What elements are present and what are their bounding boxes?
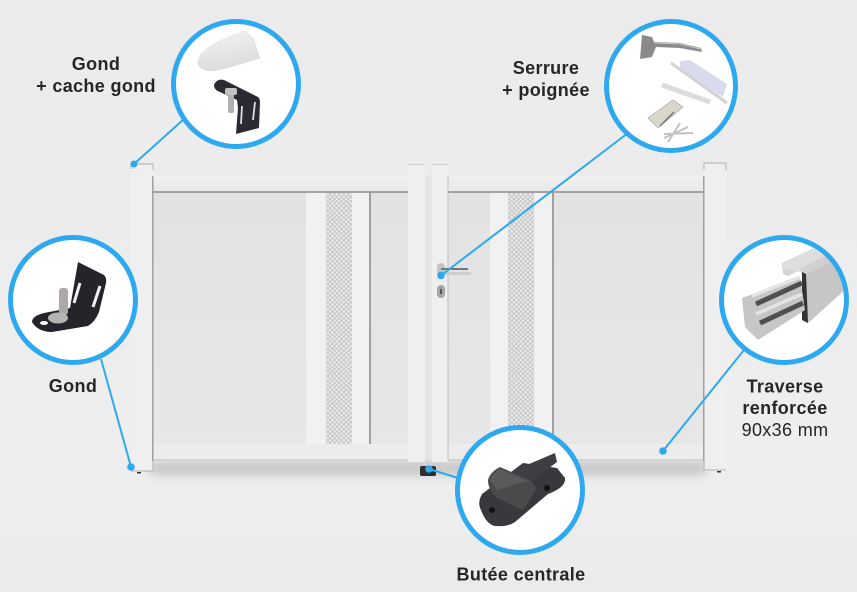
icon: hinge cover [198,31,260,71]
centre stiles [408,164,448,462]
label: serrure + poignée: Serrure [513,58,579,78]
icon: door handle [640,35,702,59]
circle: gond + cache gond [174,22,298,146]
label: gond + cache gond: Gond [72,54,120,74]
icon: reinforced rail profile [742,248,844,340]
circle: butée centrale [458,428,582,552]
leader lines [101,119,744,478]
leader: butée [425,465,458,478]
label: gond + cache gond: + cache gond [36,76,156,96]
label: traverse renforcée: Traverse [747,376,823,396]
leader: serrure [437,133,628,279]
icon: cylinder and keys [648,100,693,142]
label: traverse renforcée: 90x36 mm [742,420,828,440]
central stop on ground [420,466,436,476]
label: serrure + poignée: + poignée [502,80,590,100]
leader: traverse [659,350,744,455]
icon: hinge with bolt [214,80,260,134]
label: butée centrale: Butée centrale [457,564,585,584]
icon: central stop [479,453,565,526]
circle: gond [10,238,136,362]
left leaf [153,176,408,460]
leader: gond [101,359,135,471]
icon: mortise lock [662,60,727,103]
leader: gond + cache gond [130,119,184,168]
label: traverse renforcée: renforcée [742,398,828,418]
icon: hinge [32,262,106,332]
right post [703,163,726,472]
left post [131,164,154,474]
right leaf [448,176,704,460]
circle: serrure + poignée [606,22,736,150]
floor shadow [150,461,706,475]
circle: traverse [722,232,857,362]
label: gond: Gond [49,376,97,396]
door handle and lock [437,263,471,298]
gate [131,163,726,476]
